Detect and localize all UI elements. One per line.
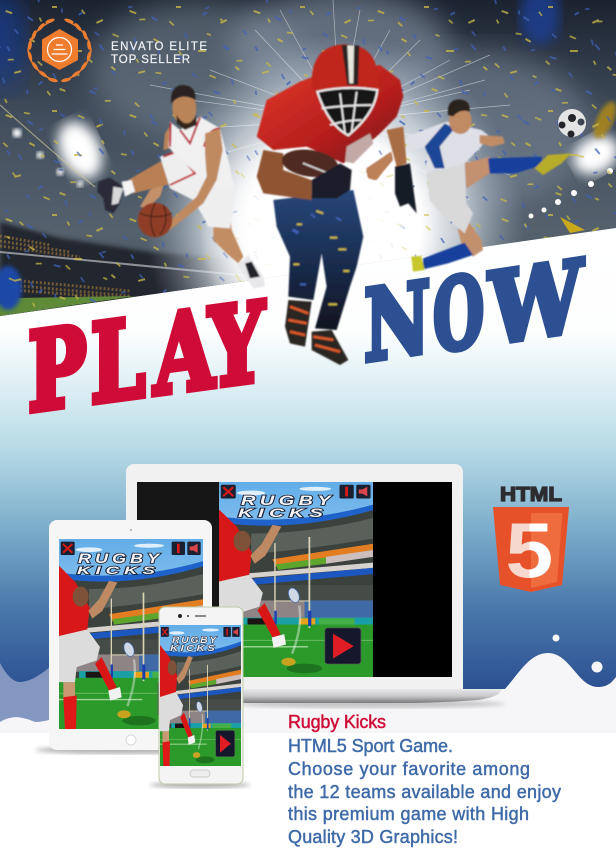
player: american football xyxy=(257,44,417,365)
hexagon xyxy=(42,29,78,70)
game description: this premium game with High xyxy=(288,804,529,824)
device: laptop: RUGBY xyxy=(241,492,335,508)
game description xyxy=(288,736,561,847)
device: tablet: KICKS xyxy=(77,565,160,577)
title word: NOW: N xyxy=(364,261,430,385)
title word: NOW xyxy=(364,237,584,385)
title word: PLAY: PLAY xyxy=(28,278,266,437)
stadium photo background xyxy=(0,0,616,330)
device: phone xyxy=(150,607,250,788)
game name: Rugby Kicks xyxy=(288,712,386,732)
crowd stands xyxy=(0,220,248,316)
badge caption xyxy=(111,41,207,66)
device: laptop xyxy=(126,464,505,708)
device: phone: KICKS xyxy=(170,644,217,653)
sparks xyxy=(150,0,510,200)
soccer ball xyxy=(558,109,586,138)
device: laptop: KICKS xyxy=(238,506,328,520)
game description: Quality 3D Graphics! xyxy=(288,827,458,847)
html5 logo: 5 xyxy=(506,508,553,594)
floodlights xyxy=(0,98,616,233)
game description: HTML5 Sport Game. xyxy=(288,736,453,756)
badge caption: ENVATO ELITE xyxy=(111,41,207,53)
laurel wreath xyxy=(27,18,92,83)
html5 logo xyxy=(493,484,569,594)
game description: Choose your favorite among xyxy=(288,759,530,779)
burst core xyxy=(204,137,430,285)
badge: envato elite xyxy=(27,18,207,83)
background waves xyxy=(0,634,616,733)
device: tablet xyxy=(35,520,215,754)
badge caption: TOP SELLER xyxy=(111,54,190,66)
confetti xyxy=(0,0,616,330)
device: phone: RUGBY xyxy=(172,635,218,645)
title word: NOW: W xyxy=(488,237,584,368)
player: soccer xyxy=(366,99,571,272)
player: basketball xyxy=(97,85,265,288)
title word: NOW: O xyxy=(433,254,484,376)
game description: the 12 teams available and enjoy xyxy=(288,782,561,802)
device: tablet: RUGBY xyxy=(78,550,163,566)
description text xyxy=(288,712,561,847)
html5 logo: HTML xyxy=(500,484,562,506)
